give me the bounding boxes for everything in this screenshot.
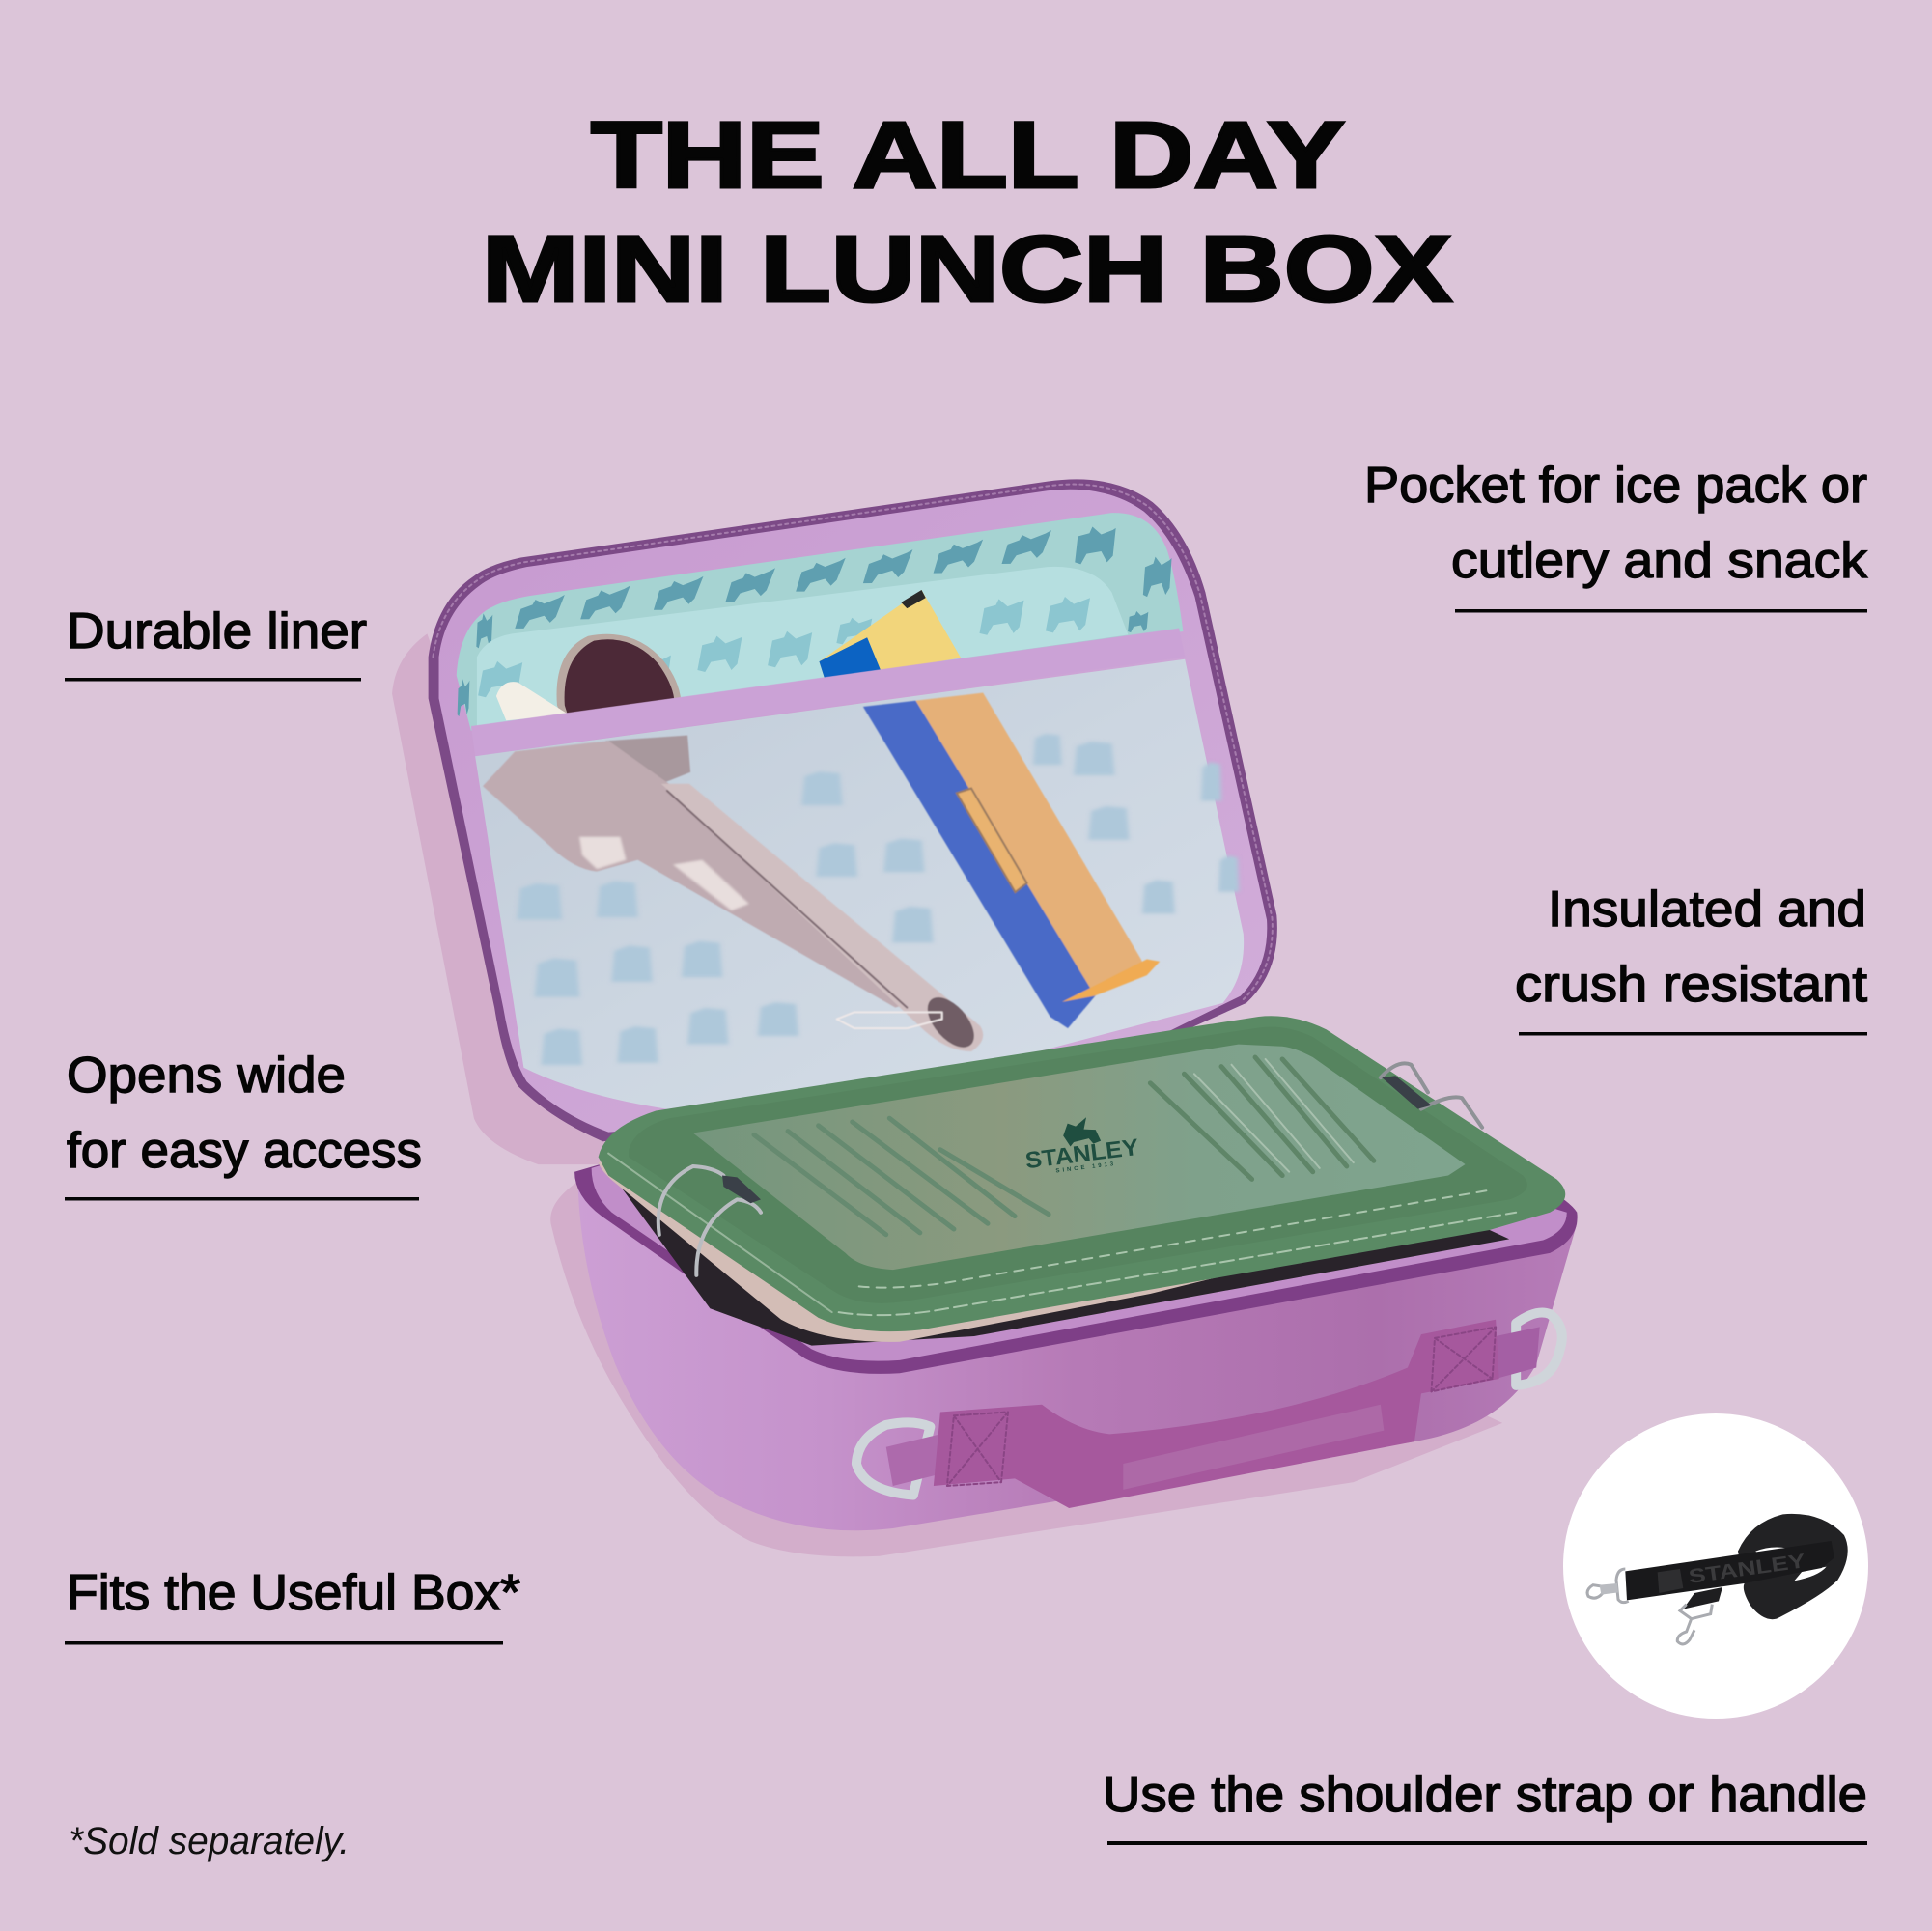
label: opens wide: Opens wide [67, 1048, 346, 1104]
zipper rim [574, 1105, 1578, 1374]
label: fits the useful box [65, 1565, 520, 1645]
title [482, 102, 1452, 322]
inner tray [477, 567, 1128, 727]
shoulder strap: STANLEY [1687, 1550, 1806, 1588]
mesh bear pattern [517, 734, 1239, 1065]
shoulder strap [1587, 1514, 1848, 1644]
label: durable liner [65, 603, 367, 682]
title: MINI LUNCH BOX [482, 216, 1452, 322]
footnote: *Sold separately. [69, 1820, 350, 1862]
lid panel [693, 1045, 1466, 1270]
tin lid [599, 1016, 1565, 1331]
label: opens wide [65, 1048, 422, 1201]
label: insulated [1515, 882, 1868, 1035]
STANLEY logo on tin [1022, 1111, 1140, 1178]
handle strap [934, 1320, 1499, 1508]
right D-ring [1516, 1312, 1562, 1385]
webbing loops [886, 1434, 940, 1486]
wire clips on tin [658, 1063, 1482, 1275]
handle and D-rings [856, 1312, 1562, 1508]
label: pocket: Pocket for ice pack or [1364, 458, 1867, 514]
lining bear pattern, dark row [458, 527, 1172, 716]
label: pocket: cutlery and snack [1451, 533, 1868, 589]
mesh pocket [475, 659, 1244, 1109]
zipper tape [592, 1105, 1567, 1361]
STANLEY logo on tin: STANLEY [1023, 1134, 1140, 1174]
label: pocket [1364, 458, 1868, 612]
handle patch [1123, 1405, 1384, 1490]
tray bear pattern [478, 597, 1090, 697]
spoon head in pocket [557, 634, 681, 716]
snack bar top wrapper [819, 590, 961, 680]
label: durable liner: Durable liner [67, 603, 367, 659]
product drop shadow [392, 633, 1502, 1556]
lid step [629, 1027, 1527, 1303]
left D-ring [856, 1422, 930, 1496]
pocket trim band [471, 629, 1185, 756]
snack bar behind mesh [863, 693, 1160, 1028]
label: fits the useful box: Fits the Useful Box* [67, 1565, 520, 1621]
strap inset circle [1563, 1413, 1868, 1719]
label: insulated: crush resistant [1515, 957, 1868, 1013]
label: insulated: Insulated and [1548, 882, 1866, 938]
cutlery behind mesh [483, 736, 984, 1053]
dark interior [602, 1105, 1509, 1346]
lid highlights [608, 1154, 1516, 1315]
knife tip in pocket [496, 682, 569, 720]
label: opens wide: for easy access [67, 1123, 422, 1179]
left ribs [754, 1118, 1049, 1235]
strap stitching [947, 1327, 1496, 1486]
open lid with mesh pocket [429, 479, 1277, 1141]
right ribs [1150, 1057, 1374, 1179]
mint lining [457, 513, 1183, 731]
box base [574, 1105, 1578, 1530]
green metal tin [599, 1016, 1565, 1342]
label: shoulder strap [1103, 1767, 1867, 1845]
STANLEY logo on tin: SINCE 1913 [1055, 1161, 1114, 1174]
label: shoulder strap: Use the shoulder strap or handle [1103, 1767, 1867, 1823]
tin base [599, 1105, 1286, 1342]
title: THE ALL DAY [591, 102, 1345, 208]
